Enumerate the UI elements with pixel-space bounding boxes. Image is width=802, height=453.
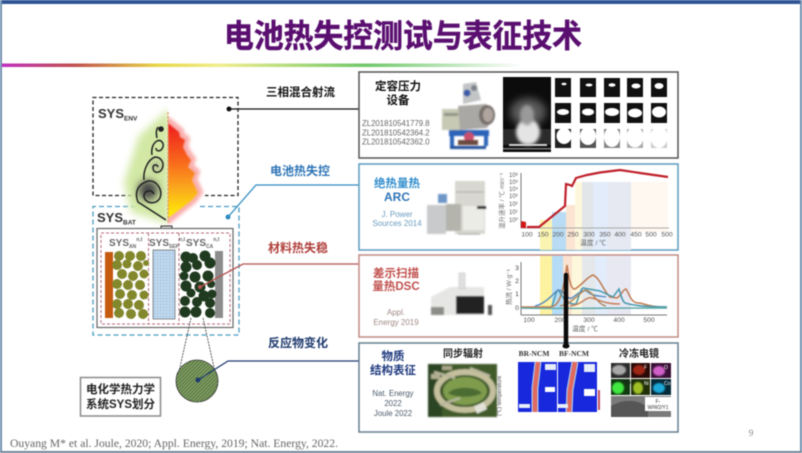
cathode: CA	[206, 244, 214, 250]
panel: ARC	[359, 164, 678, 250]
connector: three-phase jet	[226, 85, 370, 112]
photo: ARC instrument	[427, 181, 486, 234]
connector: reactant change	[196, 335, 374, 382]
photo: synchrotron aerial	[428, 364, 503, 417]
heading: 差示扫描	[373, 266, 419, 280]
photo: synchrotron aerial: (℃) temperature	[496, 376, 503, 416]
line chart: ARC heating rate: 350	[599, 232, 611, 238]
separator: SYS	[149, 238, 169, 249]
image grid: cryo-EM maps: Co	[664, 381, 671, 387]
environment system box: ENV	[124, 116, 138, 122]
reference	[372, 389, 414, 418]
battery system box	[93, 206, 239, 335]
line chart: ARC heating rate: 150	[537, 232, 549, 238]
label: system division	[80, 378, 160, 416]
heading: 设备	[386, 93, 410, 107]
line chart: DSC heat flow: 热流 / W·g⁻¹	[504, 268, 513, 305]
photo: pressure vessel	[442, 82, 495, 149]
line chart: ARC heating rate: 温升速率 / ℃·min⁻¹	[497, 172, 506, 229]
reference: Energy 2019	[373, 318, 419, 327]
line chart: DSC heat flow: 300	[583, 317, 595, 324]
image grid: cryo-EM maps: W/W2/Y1	[647, 405, 669, 411]
rainbow divider	[2, 64, 522, 67]
image grid: cryo-EM maps: O	[664, 365, 668, 371]
line chart: ARC heating rate: 10⁶	[509, 172, 519, 179]
heading: ARC	[384, 190, 410, 204]
page number: 9	[749, 429, 754, 439]
connector: battery thermal runaway: 电池热失控	[270, 163, 330, 178]
heading: BR-NCM: BR-NCM	[519, 349, 549, 358]
patent numbers: ZL201810542362.0	[362, 138, 430, 146]
connector: material thermal instability: 材料热失稳	[268, 240, 328, 255]
environment system box	[93, 98, 238, 196]
panel: DSC	[359, 255, 678, 337]
icon: smoke and flame	[124, 108, 199, 224]
heading	[370, 349, 416, 377]
battery system box: SYS	[97, 210, 123, 225]
reference: Nat. Energy	[372, 389, 414, 398]
anode: AN	[129, 244, 137, 250]
zoom circle: active particle	[176, 318, 218, 402]
separator: SEP	[169, 244, 180, 250]
line chart: ARC heating rate: 400	[614, 232, 626, 238]
heading: synchrotron: 同步辐射	[443, 347, 483, 360]
line chart: ARC heating rate: 10¹	[509, 210, 518, 216]
line chart: DSC heat flow: 500	[643, 317, 655, 324]
reference: 2022	[384, 399, 402, 408]
line chart: ARC heating rate: 450	[630, 232, 642, 238]
heading	[372, 266, 420, 293]
image grid: cryo-EM maps	[611, 363, 671, 417]
image grid: flame sequence	[555, 78, 668, 148]
battery cell	[97, 226, 233, 328]
image grid: cryo-EM maps: F-	[656, 399, 661, 405]
patent numbers	[362, 119, 430, 146]
line chart: DSC heat flow: 1	[515, 291, 519, 298]
reference: J. Power	[381, 210, 413, 219]
heatmap: BR-NCM	[518, 362, 557, 412]
panel: system diagram	[80, 98, 239, 416]
cathode: n,t	[213, 237, 220, 243]
reference	[373, 308, 419, 327]
heatmap: BF-NCM	[558, 362, 600, 412]
separator: n,t	[179, 237, 185, 243]
line chart: DSC heat flow	[504, 256, 667, 333]
heading: cryo-EM: 冷冻电镜	[619, 347, 659, 360]
line chart: ARC heating rate: 500	[645, 232, 657, 238]
photo: jet image	[503, 77, 551, 152]
line chart: DSC heat flow: 200	[554, 317, 566, 324]
image grid: cryo-EM maps: F	[644, 365, 647, 371]
line chart: DSC heat flow: 400	[613, 317, 625, 324]
line chart: ARC heating rate: 10⁰	[509, 217, 519, 224]
patent numbers: ZL201810541779.8	[362, 119, 430, 128]
line chart: ARC heating rate: 300	[583, 232, 595, 238]
line chart: ARC heating rate: 10²	[509, 202, 518, 208]
panel: material structure characterization	[359, 343, 678, 432]
title: 电池热失控测试与表征技术	[224, 18, 582, 54]
line chart: ARC heating rate: 200	[552, 232, 564, 238]
cathode: SYS	[186, 238, 206, 249]
heading: 量热DSC	[372, 279, 420, 293]
line chart: ARC heating rate: 10³	[509, 194, 518, 200]
reference: Joule 2022	[374, 409, 412, 418]
line chart: ARC heating rate	[497, 170, 673, 250]
heading	[375, 79, 421, 107]
battery system box: BAT	[123, 220, 136, 226]
cathode	[180, 237, 223, 318]
citation: Ouyang M* et al. Joule, 2020; Appl. Energy, 2019; Nat. Energy, 2022.	[10, 438, 338, 450]
arrow: black link between DSC and structure panels	[562, 275, 570, 348]
connector: three-phase jet: 三相混合射流	[266, 85, 335, 99]
connector: battery thermal runaway	[226, 163, 370, 220]
separator	[149, 237, 185, 319]
reference: Sources 2014	[372, 219, 422, 228]
anode: n,t	[136, 237, 143, 243]
heading: 绝热量热	[374, 176, 420, 190]
heading	[374, 176, 420, 204]
line chart: DSC heat flow: 3	[515, 265, 519, 272]
line chart: ARC heating rate: 温度 / ℃	[580, 238, 606, 247]
label: system division: 电化学热力学	[86, 382, 155, 396]
heading: BF-NCM: BF-NCM	[559, 349, 589, 358]
line chart: DSC heat flow: 温度 / ℃	[572, 324, 598, 333]
line chart: DSC heat flow: 0	[515, 305, 519, 312]
heading: 定容压力	[375, 79, 421, 93]
patent numbers: ZL201810542364.2	[362, 128, 430, 138]
line chart: ARC heating rate: 500	[661, 232, 673, 238]
line chart: ARC heating rate: 100	[521, 232, 533, 238]
anode	[105, 237, 149, 319]
anode: SYS	[109, 238, 129, 249]
heading: 物质	[382, 349, 405, 363]
reference: Appl.	[387, 308, 405, 317]
photo: DSC instrument	[431, 273, 492, 315]
label: system division: 系统SYS划分	[86, 397, 156, 411]
reference	[372, 210, 422, 228]
line chart: ARC heating rate: 10⁵	[509, 179, 519, 186]
line chart: ARC heating rate: 10⁴	[509, 186, 519, 193]
environment system box: SYS	[98, 106, 124, 121]
heading: 结构表征	[370, 363, 416, 377]
image grid: cryo-EM maps: Ni	[644, 381, 649, 387]
panel: constant-volume pressure equipment	[359, 72, 678, 158]
connector: material thermal instability	[198, 240, 370, 289]
line chart: DSC heat flow: 100	[523, 317, 535, 324]
line chart: ARC heating rate: 250	[567, 232, 579, 238]
line chart: DSC heat flow: 2	[515, 278, 519, 285]
connector: reactant change: 反应物变化	[268, 335, 328, 350]
image grid: cryo-EM maps: Mn	[624, 380, 631, 386]
